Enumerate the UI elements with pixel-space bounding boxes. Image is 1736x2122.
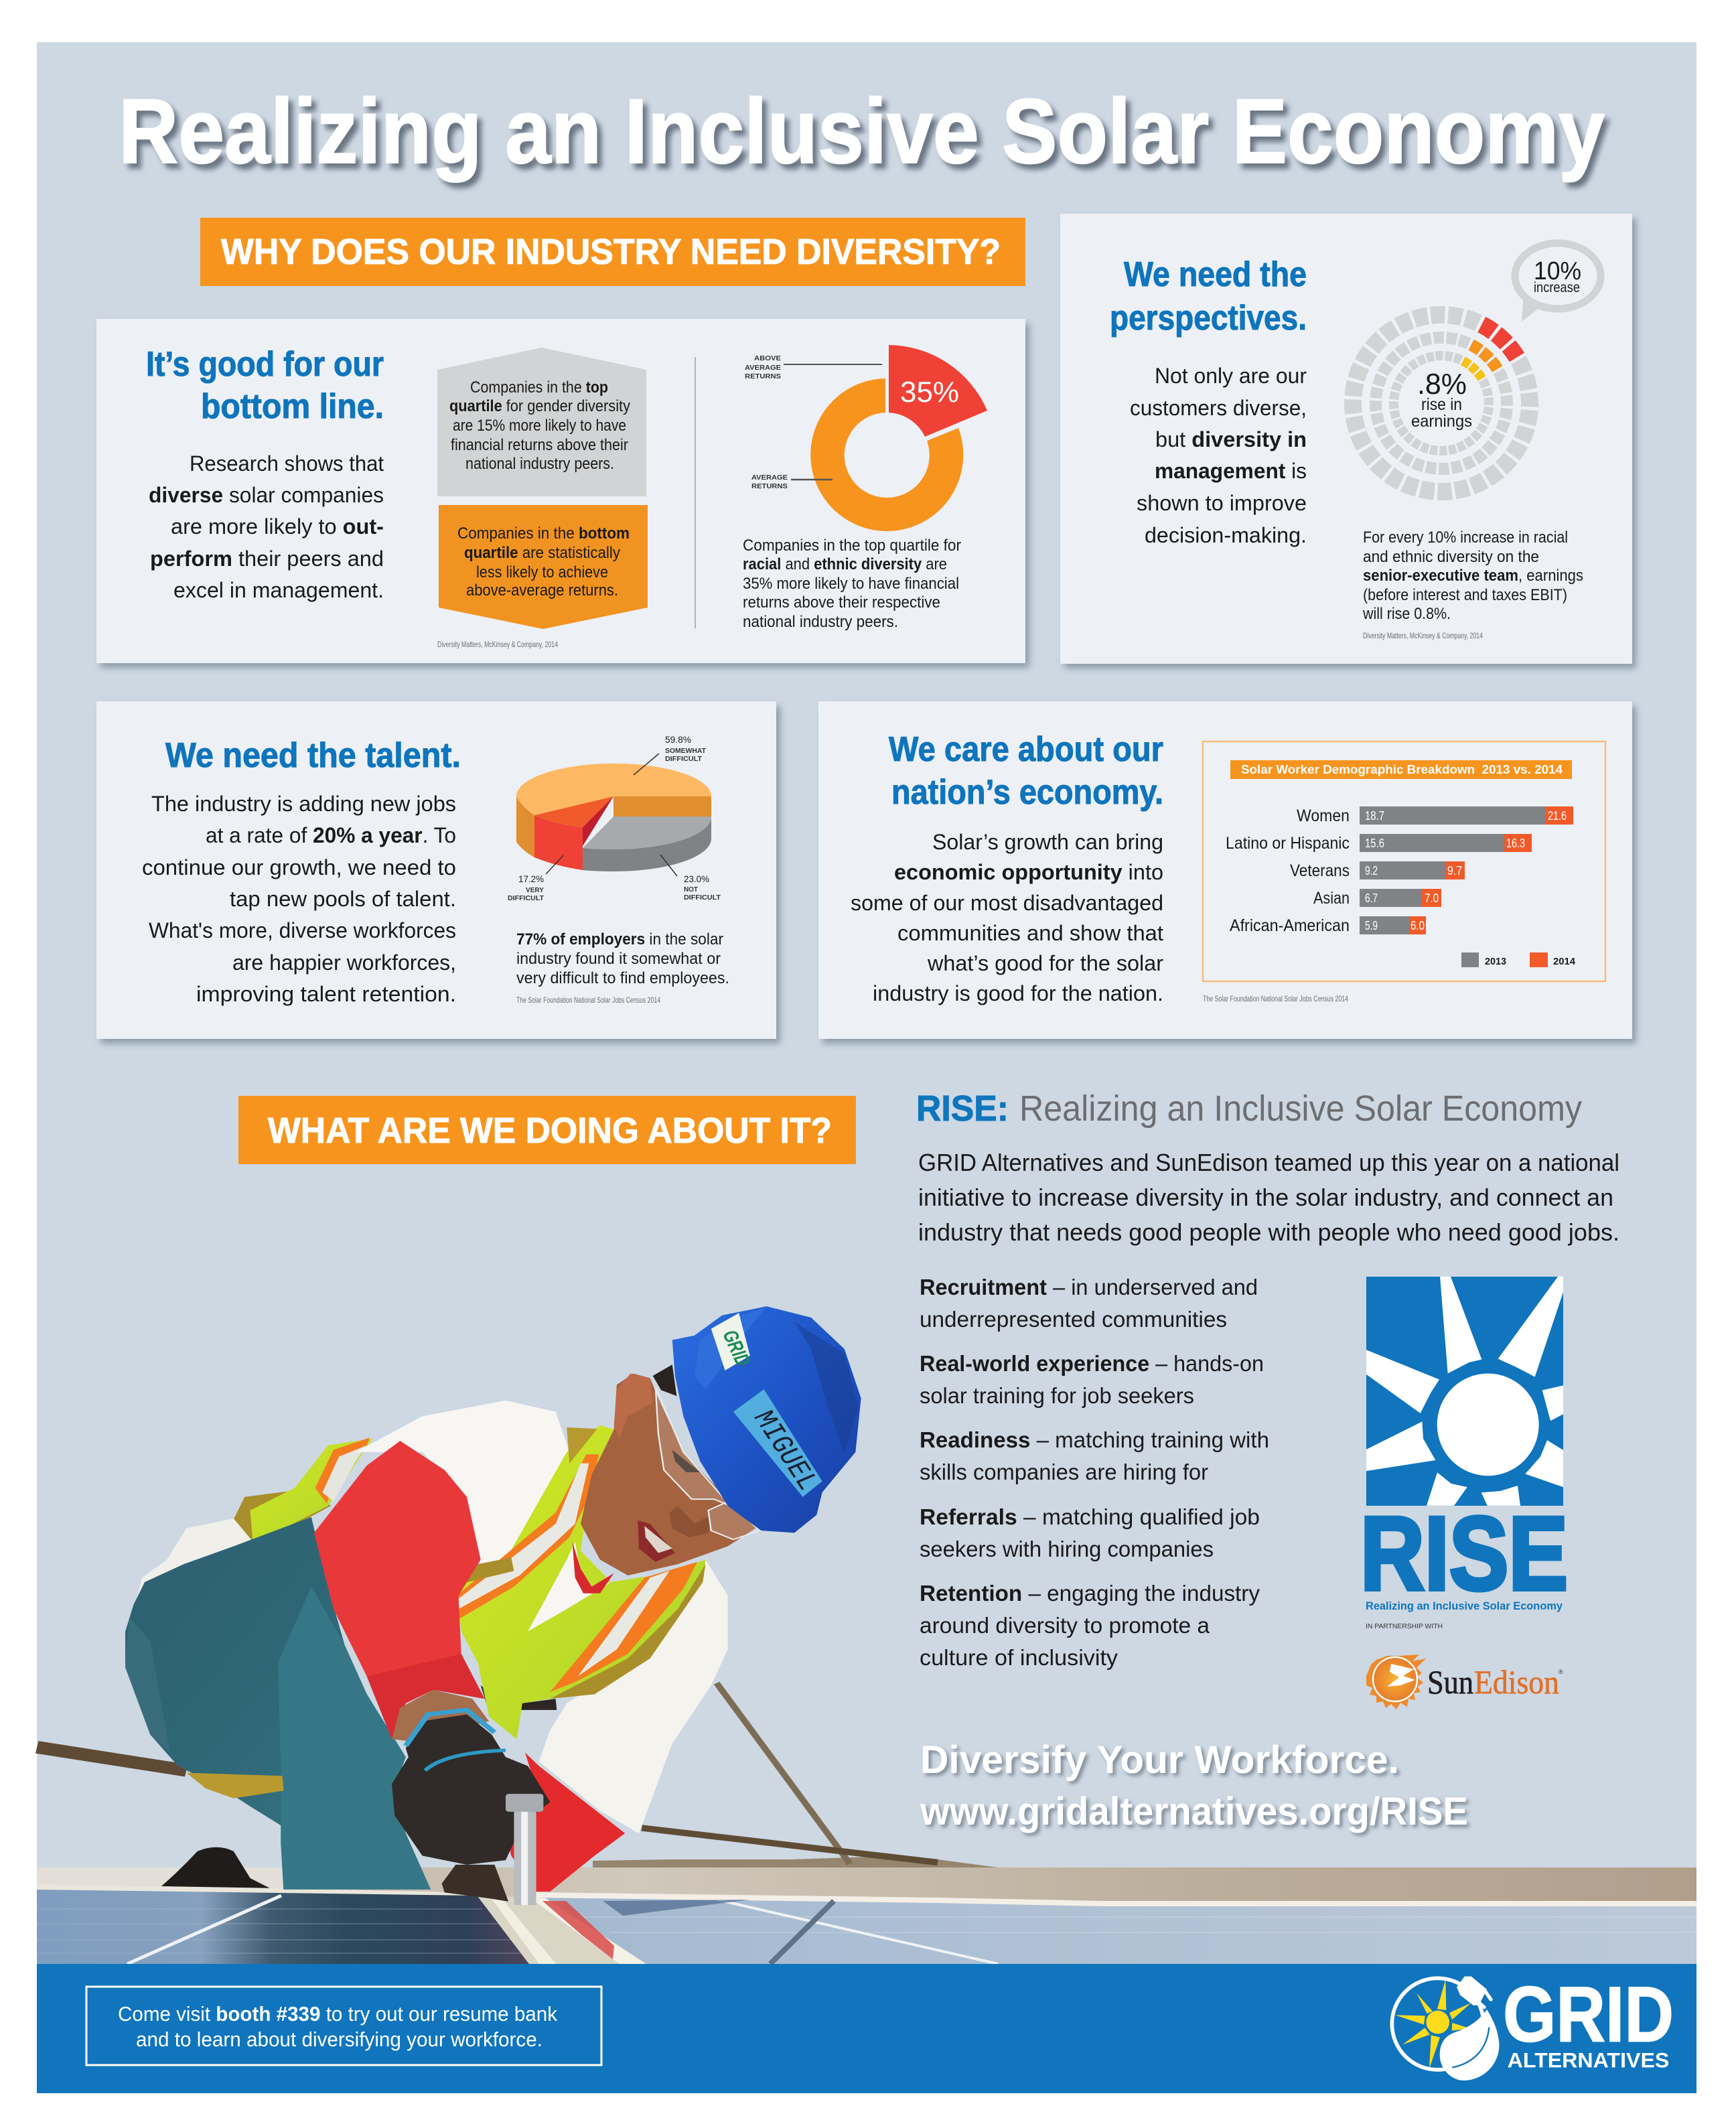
- pie chart: SOMEWHAT: [665, 747, 707, 755]
- list: RISE program: underrepresented communities: [920, 1307, 1227, 1332]
- heading: bottom line: bottom line.: [201, 387, 384, 426]
- logo: SunEdison: Edison: [1474, 1663, 1559, 1701]
- text: every 10%: (before interest and taxes EBIT): [1363, 586, 1567, 604]
- list: RISE program: Retention – engaging the industry: [920, 1581, 1260, 1606]
- bar chart: demographics: 9.2: [1365, 864, 1378, 877]
- bar chart: demographics: Latino or Hispanic: [1226, 834, 1350, 853]
- text: talent: [142, 792, 456, 1006]
- chart title: [1230, 760, 1572, 779]
- booth callout: [86, 1987, 601, 2065]
- text: research: perform their peers and: [150, 547, 384, 571]
- text: 77% of employers: 77% of employers in the solar: [516, 930, 723, 948]
- bar chart: demographics: 18.7: [1365, 809, 1384, 823]
- hard hat: [672, 1306, 861, 1533]
- section header: what are we doing: [238, 1096, 856, 1164]
- bar chart: demographics: [1203, 741, 1605, 981]
- callout: top quartile: [437, 348, 646, 496]
- donut chart: [745, 345, 987, 531]
- text: talent: at a rate of 20% a year. To: [206, 823, 456, 847]
- text: talent: are happier workforces,: [232, 950, 456, 975]
- photo: worker: MIGUEL: [745, 1407, 824, 1495]
- harness: [192, 1488, 331, 1556]
- callout: bottom quartile: less likely to achieve: [476, 563, 608, 581]
- text: research: [149, 451, 384, 602]
- section header: why diversity: [200, 218, 1025, 286]
- pie chart: VERY: [526, 886, 544, 894]
- photo: solar roof: [37, 1857, 1696, 1964]
- source note: The Solar Foundation National Solar Jobs Census 2014: [1203, 994, 1348, 1003]
- text: RISE intro: initiative to increase diversity in the solar industry, and connect an: [918, 1184, 1613, 1211]
- text: 77% of employers: very difficult to find employees.: [516, 969, 729, 987]
- section header: why diversity: WHY DOES OUR INDUSTRY NEED DIVERSITY?: [221, 232, 1001, 272]
- heading: RISE: Realizing an Inclusive Solar Economy: [1019, 1088, 1582, 1129]
- heading: economy: nation’s economy.: [891, 773, 1163, 812]
- text: 77% of employers: industry found it somewhat or: [516, 950, 721, 968]
- donut chart: 35%: [900, 376, 959, 409]
- text: every 10%: For every 10% increase in racial: [1363, 528, 1568, 547]
- call to action: Diversify Your Workforce.: [920, 1738, 1399, 1782]
- logo: GRID Alternatives: [1392, 1971, 1674, 2080]
- logo: RISE: [1360, 1277, 1568, 1630]
- text: racial diversity: national industry peers.: [743, 613, 898, 631]
- list: RISE program: around diversity to promote a: [920, 1613, 1210, 1638]
- waist strap: [481, 1685, 557, 1710]
- call to action: [920, 1738, 1468, 1833]
- heading: perspectives: [1110, 255, 1307, 338]
- red sleeve: [314, 1441, 484, 1739]
- forearm: [392, 1690, 489, 1742]
- text: customers: Not only are our: [1155, 364, 1307, 388]
- text: economy: communities and show that: [897, 921, 1163, 945]
- stat: .8% rise: .8%: [1417, 368, 1467, 401]
- callout: top quartile: financial returns above their: [451, 436, 628, 454]
- text: every 10%: [1362, 528, 1583, 623]
- logo: SunEdison: ®: [1559, 1669, 1563, 1675]
- text: customers: customers diverse,: [1130, 396, 1307, 420]
- text: racial diversity: [743, 537, 961, 631]
- footer bar: [37, 1964, 1696, 2093]
- text: economy: Solar’s growth can bring: [932, 830, 1163, 854]
- logo: GRID Alternatives: ALTERNATIVES: [1508, 2049, 1669, 2072]
- text: racial diversity: racial and ethnic diversity are: [743, 555, 947, 573]
- list: RISE program: seekers with hiring companies: [920, 1537, 1214, 1561]
- text: racial diversity: Companies in the top quartile for: [743, 537, 961, 555]
- pie chart: DIFFICULT: [665, 755, 703, 763]
- white shirt torso: [356, 1401, 569, 1564]
- head skin: [581, 1374, 755, 1575]
- legend: 2013: [1485, 956, 1506, 967]
- bar chart: demographics: 9.7: [1447, 864, 1462, 877]
- text: RISE intro: industry that needs good people with people who need good jobs.: [918, 1218, 1619, 1246]
- pie chart: 23.0%: [684, 873, 709, 884]
- callout: bottom quartile: Companies in the bottom: [457, 524, 630, 543]
- bar chart: demographics: African-American: [1230, 916, 1350, 935]
- heading: economy: We care about our: [889, 730, 1163, 769]
- legend: [1461, 952, 1576, 967]
- vest front: [455, 1425, 705, 1739]
- source note: Diversity Matters, McKinsey & Company, 2014: [437, 640, 558, 649]
- pie chart: DIFFICULT: [508, 894, 545, 902]
- call to action: www.gridalternatives.org/RISE: [920, 1790, 1468, 1833]
- text: talent: tap new pools of talent.: [230, 887, 456, 911]
- bar chart: demographics: 6.7: [1365, 892, 1378, 905]
- heading: economy: [889, 730, 1163, 812]
- pie chart: NOT: [684, 886, 699, 894]
- list: RISE program: Recruitment – in underserved and: [920, 1275, 1258, 1299]
- text: talent: continue our growth, we need to: [142, 855, 456, 879]
- callout: top quartile: are 15% more likely to have: [453, 417, 626, 435]
- chart title: Solar Worker Demographic Breakdown 2013 vs. 2014: [1241, 763, 1563, 776]
- stat: .8% rise: [1411, 368, 1472, 431]
- pie chart: 17.2%: [518, 873, 544, 884]
- callout: bottom quartile: above-average returns.: [466, 581, 618, 599]
- text: customers: but diversity in: [1155, 427, 1307, 451]
- speech bubble: 10% increase: [1515, 243, 1601, 322]
- stat: .8% rise: rise in: [1421, 395, 1462, 414]
- logo: RISE: Realizing an Inclusive Solar Economy: [1366, 1600, 1563, 1612]
- callout: top quartile: national industry peers.: [465, 455, 614, 473]
- tool: [514, 1802, 536, 1905]
- list: RISE program: skills companies are hiring for: [920, 1460, 1208, 1484]
- bar chart: demographics: 21.6: [1548, 809, 1567, 823]
- text: talent: The industry is adding new jobs: [151, 792, 456, 816]
- logo: RISE: IN PARTNERSHIP WITH: [1366, 1623, 1443, 1630]
- back of shirt: [137, 1518, 253, 1600]
- callout: top quartile: Companies in the top: [470, 378, 608, 397]
- shirt at chest and collar: [528, 1542, 611, 1632]
- heading: RISE: RISE:: [916, 1088, 1009, 1129]
- bar chart: demographics: 15.6: [1365, 837, 1384, 850]
- text: customers: shown to improve: [1137, 491, 1307, 515]
- heading: perspectives: perspectives.: [1110, 299, 1307, 338]
- booth callout: and to learn about diversifying your workforce.: [136, 2028, 542, 2051]
- donut chart: AVERAGE: [751, 474, 788, 482]
- radial chart: rings: [1317, 279, 1566, 528]
- donut chart: RETURNS: [745, 372, 781, 380]
- text: racial diversity: returns above their respective: [743, 593, 940, 612]
- donut chart: AVERAGE: [745, 364, 781, 372]
- text: economy: some of our most disadvantaged: [851, 891, 1163, 915]
- text: economy: [851, 830, 1163, 1005]
- bar chart: demographics: 5.9: [1365, 919, 1378, 932]
- bar chart: demographics: 7.0: [1425, 892, 1439, 905]
- legend: 2014: [1553, 956, 1576, 967]
- text: research: diverse solar companies: [149, 483, 384, 507]
- bar chart: demographics: 16.3: [1506, 837, 1525, 850]
- straps: [37, 1683, 938, 1864]
- logo: RISE: RISE: [1360, 1496, 1568, 1612]
- vest stripes: [455, 1454, 599, 1620]
- belt strap on leg: [186, 1773, 283, 1798]
- panel: economy: [818, 701, 1632, 1039]
- list: RISE program: [920, 1275, 1269, 1670]
- text: RISE intro: [918, 1149, 1619, 1246]
- text: economy: industry is good for the nation.: [873, 981, 1163, 1005]
- pie chart: DIFFICULT: [684, 894, 721, 902]
- stat: .8% rise: earnings: [1411, 412, 1472, 431]
- text: research: excel in management.: [173, 578, 384, 602]
- text: every 10%: senior-executive team, earnings: [1363, 567, 1583, 585]
- logo: SunEdison: Sun: [1427, 1663, 1473, 1701]
- text: customers: [1130, 364, 1307, 547]
- heading: perspectives: We need the: [1124, 255, 1307, 294]
- booth callout: Come visit booth #339 to try out our resume bank: [118, 2002, 557, 2026]
- logo: GRID Alternatives: GRID: [1503, 1971, 1674, 2058]
- bar chart: demographics: Asian: [1313, 889, 1350, 908]
- source note: The Solar Foundation National Solar Jobs Census 2014: [516, 995, 660, 1005]
- title: Realizing an Inclusive Solar Economy: [119, 80, 1605, 183]
- list: RISE program: culture of inclusivity: [920, 1645, 1118, 1670]
- red lower sleeve: [506, 1752, 625, 1892]
- speech bubble: 10% increase: increase: [1534, 280, 1580, 295]
- photo: worker: GRID: [717, 1328, 755, 1368]
- list: RISE program: Real-world experience – hands-on: [920, 1351, 1264, 1376]
- callout: top quartile: quartile for gender diversity: [449, 397, 630, 415]
- text: 77% of employers: [516, 930, 729, 987]
- pie chart: [508, 734, 721, 902]
- list: RISE program: Readiness – matching training with: [920, 1427, 1269, 1452]
- list: RISE program: Referrals – matching qualified job: [920, 1504, 1260, 1529]
- bar chart: demographics: Veterans: [1290, 861, 1350, 880]
- text: every 10%: and ethnic diversity on the: [1363, 548, 1539, 566]
- panel: perspectives: [1060, 214, 1632, 664]
- text: customers: management is: [1155, 459, 1307, 483]
- text: RISE intro: GRID Alternatives and SunEdison teamed up this year on a national: [918, 1149, 1619, 1176]
- bar chart: demographics: 6.0: [1410, 919, 1425, 932]
- text: every 10%: will rise 0.8%.: [1362, 605, 1451, 623]
- text: economy: economic opportunity into: [894, 860, 1163, 884]
- text: racial diversity: 35% more likely to have financial: [743, 575, 959, 593]
- pie chart: 59.8%: [665, 734, 691, 745]
- callout: bottom quartile: quartile are statistically: [464, 544, 620, 562]
- source note: Diversity Matters, McKinsey & Company, 2014: [1363, 631, 1483, 640]
- bar chart: demographics: Women: [1297, 806, 1350, 825]
- boot: [161, 1847, 270, 1888]
- logo: SunEdison: [1366, 1654, 1563, 1709]
- callout: bottom quartile: [439, 505, 648, 629]
- glove: [392, 1715, 550, 1865]
- panel: talent: [96, 701, 776, 1039]
- text: economy: what’s good for the solar: [927, 951, 1163, 975]
- text: customers: decision-making.: [1145, 523, 1307, 547]
- speech bubble: 10% increase: 10%: [1534, 257, 1581, 285]
- donut chart: ABOVE: [754, 354, 781, 362]
- text: research: are more likely to out-: [171, 514, 384, 539]
- heading: bottom line: It’s good for our: [146, 345, 384, 384]
- photo: worker: [37, 1306, 938, 1905]
- shirt sleeve right: [539, 1560, 728, 1833]
- text: talent: improving talent retention.: [196, 982, 456, 1006]
- text: research: Research shows that: [190, 451, 384, 476]
- heading: talent: We need the talent.: [165, 736, 461, 775]
- section header: what are we doing: WHAT ARE WE DOING ABOUT IT?: [268, 1111, 832, 1151]
- list: RISE program: solar training for job seekers: [920, 1383, 1194, 1408]
- panel: bottom line: [96, 319, 1025, 663]
- denim trousers: [125, 1517, 431, 1890]
- donut chart: RETURNS: [751, 482, 788, 490]
- text: talent: What's more, diverse workforces: [149, 918, 456, 942]
- heading: bottom line: [146, 345, 384, 426]
- safety glasses: [656, 1387, 760, 1539]
- vest back: [250, 1439, 372, 1544]
